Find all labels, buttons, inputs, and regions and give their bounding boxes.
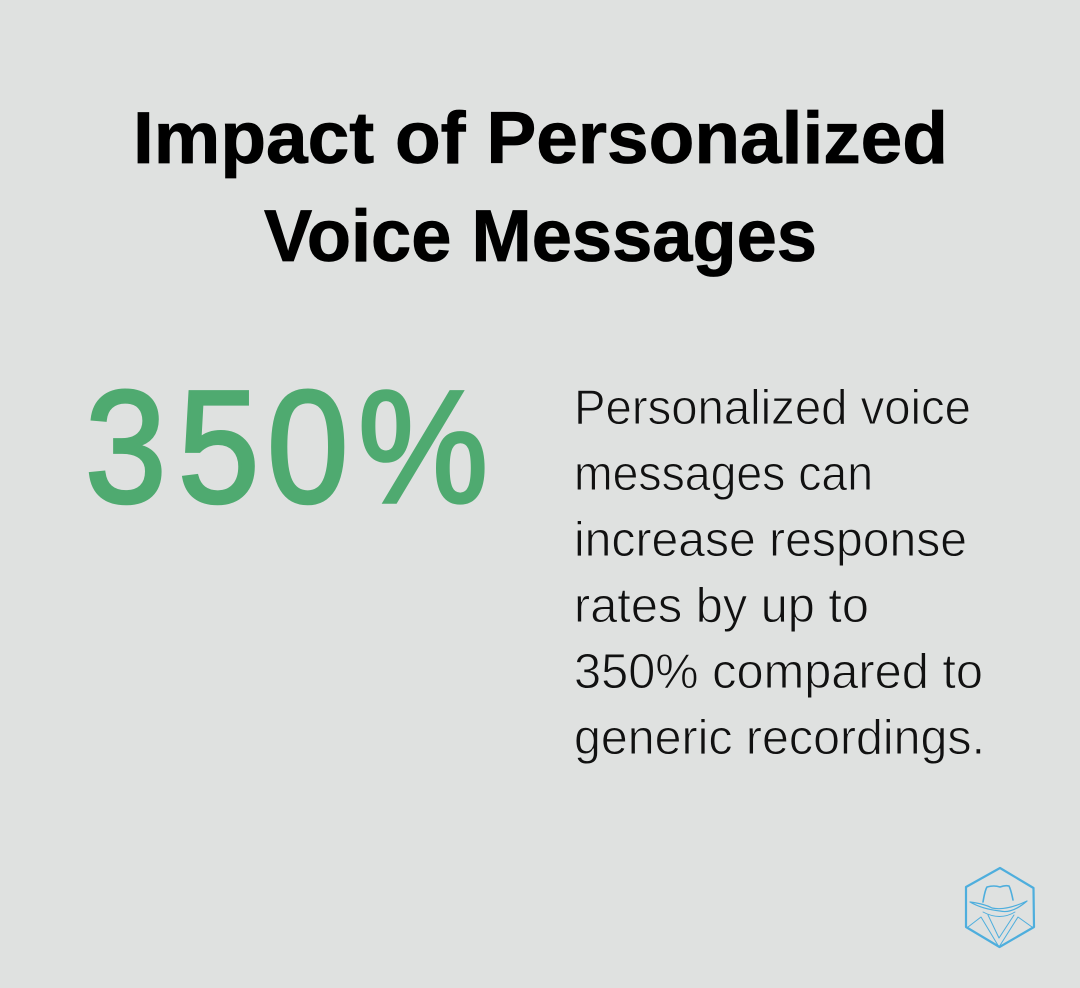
title: Impact of Personalized [133, 98, 948, 179]
description text: Personalized voice [574, 381, 971, 435]
big statistic: 350%: 350% [85, 358, 488, 536]
description text: 350% compared to [574, 645, 983, 699]
description text: messages can [574, 447, 873, 501]
description text: rates by up to [574, 579, 869, 633]
description text: generic recordings. [574, 711, 985, 765]
description text [574, 381, 985, 765]
title: Voice Messages [264, 196, 817, 277]
title [133, 98, 948, 277]
description text: increase response [574, 513, 967, 567]
icon: spy logo in hexagon [966, 868, 1034, 947]
